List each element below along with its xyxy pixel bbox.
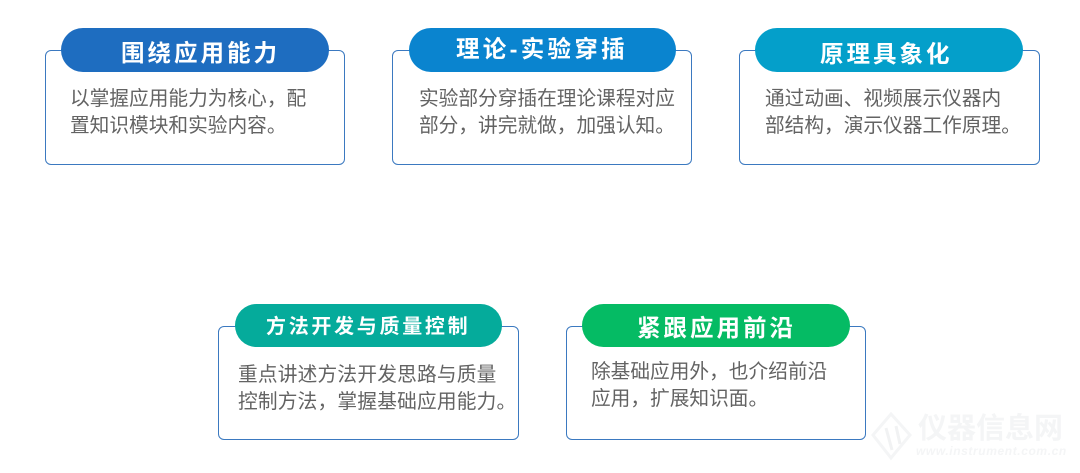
text block: 通过动画、视频展示仪器内: [765, 88, 1001, 110]
card outline: [45, 50, 345, 165]
heading: 理论-实验穿插: [456, 36, 628, 62]
card outline: [392, 50, 692, 165]
text block: 部结构，演示仪器工作原理。: [765, 114, 1021, 136]
text block: [70, 88, 306, 136]
text block: [765, 88, 1021, 136]
panel: 方法开发与质量控制: [218, 304, 519, 440]
heading: 方法开发与质量控制: [266, 316, 470, 338]
text block: 控制方法，掌握基础应用能力。: [238, 390, 516, 412]
text block: [591, 360, 827, 410]
heading pill: [409, 28, 676, 72]
heading: 原理具象化: [820, 41, 952, 67]
watermark: [872, 412, 1067, 460]
heading pill: [61, 28, 329, 72]
text block: 应用，扩展知识面。: [591, 388, 768, 410]
icon: watermark logo: [872, 412, 912, 460]
panel: 紧跟应用前沿: [566, 304, 866, 440]
text block: [419, 88, 675, 136]
text block: 置知识模块和实验内容。: [70, 114, 287, 136]
heading pill: [582, 304, 850, 347]
text block: 部分，讲完就做，加强认知。: [419, 114, 675, 136]
watermark name: 仪器信息网: [918, 413, 1063, 445]
text block: 以掌握应用能力为核心，配: [70, 88, 306, 110]
card outline: [566, 326, 866, 440]
heading pill: [755, 28, 1023, 72]
card outline: [739, 50, 1040, 165]
heading pill: [235, 304, 502, 347]
heading: 围绕应用能力: [121, 40, 280, 66]
text block: 重点讲述方法开发思路与质量: [238, 364, 497, 386]
panel: 理论-实验穿插: [392, 28, 692, 165]
heading: 紧跟应用前沿: [637, 315, 796, 341]
text block: 除基础应用外，也介绍前沿: [591, 361, 827, 383]
watermark url: www.instrument.com.cn: [916, 444, 1067, 458]
panel: 围绕应用能力: [45, 28, 345, 165]
card outline: [218, 326, 519, 440]
text block: 实验部分穿插在理论课程对应: [419, 88, 675, 110]
text block: [238, 364, 516, 412]
panel: 原理具象化: [739, 28, 1040, 165]
